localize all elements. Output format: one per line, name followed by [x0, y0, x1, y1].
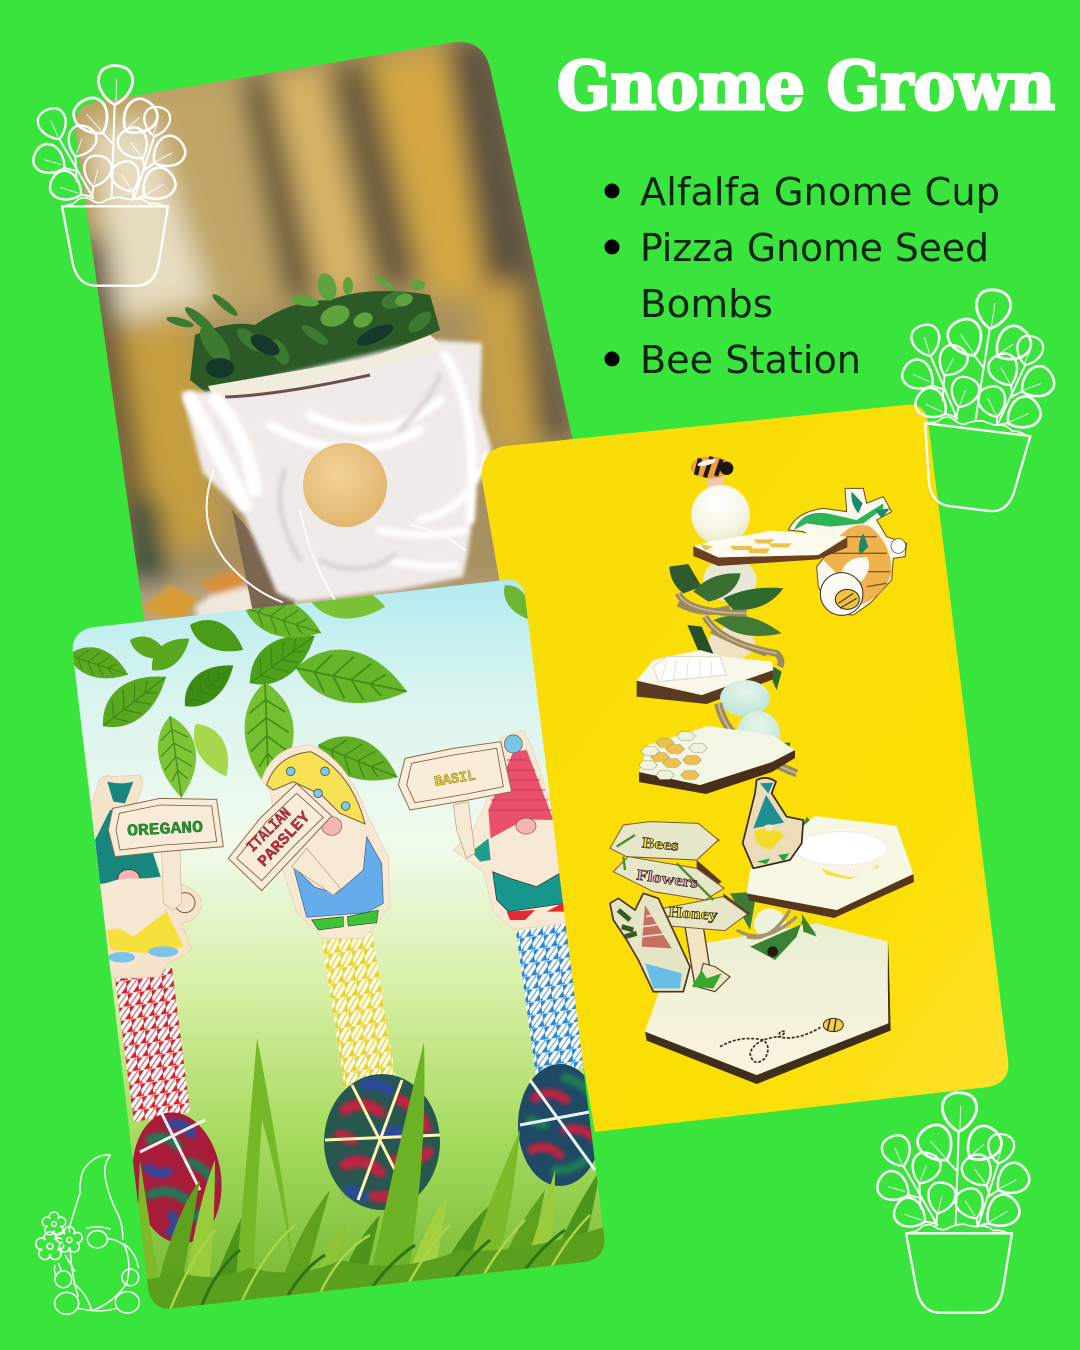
icon: tree leaves	[64, 579, 538, 800]
icon: grass blades	[130, 1038, 610, 1320]
icon: stem under platform	[730, 817, 817, 960]
icon: third ball	[708, 627, 755, 660]
bullet list	[604, 170, 1000, 382]
icon: lower balls and twine	[712, 667, 797, 773]
bullet: pizza gnome seed bombs	[604, 226, 989, 326]
icon: second ball	[703, 564, 757, 602]
icon: alfalfa sprouts	[165, 271, 440, 392]
sign: oregano: OREGANO	[127, 819, 204, 842]
sign label: Honey: Honey	[668, 904, 718, 924]
sign: basil	[398, 742, 512, 858]
sign: italian parsley	[228, 783, 341, 895]
sign: basil: BASIL	[433, 769, 477, 791]
icon: beehive	[788, 488, 907, 615]
icon: lower right platform	[747, 816, 914, 918]
title: Gnome Grown	[557, 47, 1055, 125]
icon: seed bombs	[124, 1064, 602, 1249]
bullet: pizza gnome seed bombs: Bombs	[640, 282, 773, 326]
icon: wooden ball and bee	[691, 456, 750, 545]
icon: white fur gnome cup	[182, 335, 492, 602]
sign label: Bees: Bees	[641, 834, 679, 855]
panel: photo of bee station	[470, 395, 1020, 1145]
fallen leaves	[142, 568, 252, 619]
bullet: bee station: Bee Station	[640, 338, 861, 382]
icon: blue twine stick	[516, 924, 584, 1076]
tower lower section	[610, 778, 914, 1084]
plant icon: top left	[29, 65, 190, 286]
bullet: pizza gnome seed bombs: Pizza Gnome Seed	[640, 226, 989, 270]
panel: photo of pizza gnome seed bombs	[60, 570, 620, 1320]
icon: wooden nose	[303, 443, 387, 527]
plant icon: bottom right	[873, 1092, 1034, 1313]
icon: leaves and twine	[669, 564, 783, 667]
icon: gnome outline with flower	[36, 1155, 139, 1314]
icon: honeycomb platform	[639, 726, 795, 794]
plant icon: right	[883, 279, 1070, 518]
sign: oregano	[108, 798, 223, 910]
icon: italian parsley gnome	[228, 745, 390, 938]
bullet: alfalfa gnome cup: Alfalfa Gnome Cup	[640, 170, 1000, 214]
icon: top platform	[693, 531, 847, 566]
icon: red twine stick	[115, 968, 190, 1122]
blurred autumn forest backdrop	[60, 40, 575, 655]
icon: second platform	[637, 650, 773, 704]
icon: small teal gnome	[743, 778, 803, 868]
gnomes	[83, 731, 567, 978]
bee trail	[720, 1027, 822, 1062]
panel: photo of alfalfa gnome cup	[75, 42, 572, 622]
sign: italian parsley: PARSLEY	[254, 808, 315, 871]
tower upper section	[637, 456, 907, 773]
icon: striped hat gnome	[610, 893, 730, 992]
icon: oregano gnome	[83, 775, 223, 978]
icon: hexagon base	[645, 923, 891, 1084]
icon: yellow twine stick	[322, 932, 396, 1090]
icon: basil gnome	[398, 731, 567, 929]
sign: italian parsley: ITALIAN	[243, 805, 295, 856]
icon: cup stem	[232, 510, 296, 609]
icon: gnome signpost	[610, 822, 750, 992]
sign label: Flowers: Flowers	[635, 866, 699, 892]
